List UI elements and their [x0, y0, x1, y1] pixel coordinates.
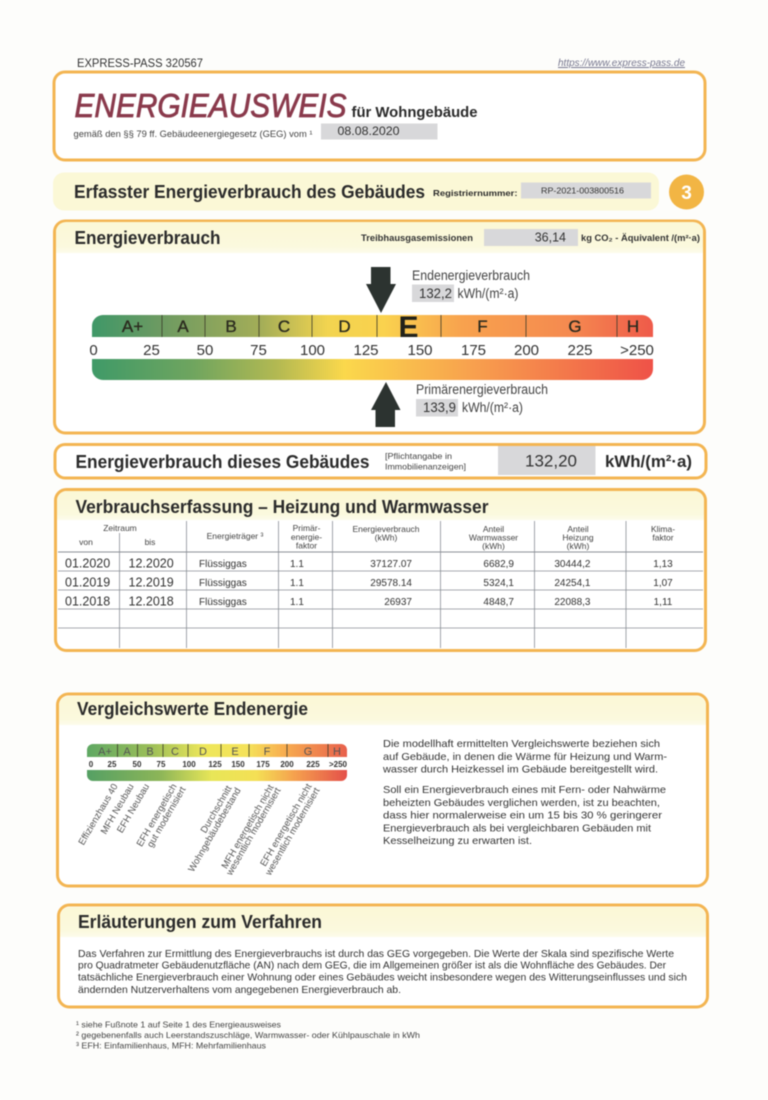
primary energy value: kWh/(m²·a) — [462, 400, 523, 415]
upper energy scale: H — [627, 317, 639, 336]
mini scale numbers: 125 — [208, 760, 222, 769]
table row 2020: 37127.07 — [370, 559, 412, 570]
mini scale numbers: 150 — [231, 760, 245, 769]
mini scale numbers: 100 — [182, 760, 196, 769]
heading: Energieverbrauch — [74, 228, 220, 248]
table row 2018: 1.1 — [290, 597, 304, 608]
explanatory text — [382, 738, 668, 847]
rotated building type labels: Wohngebäudebestand — [186, 786, 244, 874]
mini scale numbers: 0 — [89, 760, 94, 769]
section banner — [53, 172, 659, 210]
procedure text: tatsächliche Energieverbrauch einer Wohnung oder eines Gebäudes weicht insbesondere wegen des Witterungseinflusses und sich — [78, 972, 687, 984]
explanatory text: auf Gebäude, in denen die Wärme für Heizung und Warm- — [383, 751, 668, 763]
registration label: Registriernummer: — [433, 188, 518, 198]
table header: (kWh) — [567, 541, 589, 551]
upper energy scale: D — [338, 317, 351, 336]
note: [Pflichtangabe in — [385, 451, 452, 461]
explanatory text: Soll ein Energieverbrauch eines mit Fern- oder Nahwärme — [383, 784, 666, 796]
table header: Zeitraum — [103, 523, 137, 533]
mini scale numbers: 25 — [108, 760, 117, 769]
mini lower scale — [87, 770, 347, 781]
note line 2: Immobilienanzeigen] — [385, 462, 466, 472]
rotated building type labels: Effizienzhaus 40 — [77, 782, 121, 847]
scale numbers: 75 — [250, 342, 267, 359]
footnotes: ³ EFH: Einfamilienhaus, MFH: Mehrfamilienhaus — [76, 1040, 266, 1050]
table row 2019: 24254,1 — [554, 578, 591, 589]
primary energy value: 133,9 — [423, 400, 456, 415]
upper energy scale: G — [568, 317, 582, 336]
upper energy scale: B — [225, 317, 237, 336]
heading: Verbrauchserfassung – Heizung und Warmwasser — [76, 497, 488, 517]
emissions value — [484, 229, 578, 246]
registration number: RP-2021-003800516 — [541, 186, 624, 196]
scale numbers: 100 — [300, 342, 325, 359]
table row 2018: Flüssiggas — [199, 597, 247, 608]
table header: Anteil — [483, 524, 504, 534]
final energy value: kWh/(m²·a) — [458, 286, 518, 301]
mini upper scale: H — [333, 746, 341, 758]
table header: faktor — [652, 532, 674, 542]
heading: Erläuterungen zum Verfahren — [78, 912, 322, 932]
table row 2019: 1.1 — [290, 578, 304, 589]
mini upper scale: D — [199, 746, 207, 758]
table row 2019: 1,07 — [653, 578, 673, 589]
mini upper scale: A+ — [98, 746, 112, 758]
page number badge: 3 — [681, 183, 692, 204]
upper energy scale: C — [278, 317, 290, 336]
explanatory text: dass hier normalerweise ein um 15 bis 30 % geringerer — [383, 810, 663, 822]
scale numbers: 175 — [461, 342, 486, 359]
value — [498, 446, 596, 475]
primary energy value — [416, 399, 523, 416]
rotated building type labels: Durchschnitt — [199, 784, 235, 835]
rotated building type labels: gut modernisiert — [145, 785, 189, 849]
table row 2019: 29578.14 — [370, 578, 412, 589]
upper energy scale: F — [477, 317, 488, 336]
scale numbers — [89, 342, 654, 359]
mini upper scale: E — [231, 746, 239, 758]
table row 2019: 12.2019 — [128, 576, 174, 590]
explanatory text: Energieverbrauch als bei vergleichbaren Gebäuden mit — [383, 822, 651, 834]
arrow: final energy — [366, 267, 396, 313]
table header: Energieträger ³ — [207, 531, 264, 541]
mini upper scale: C — [171, 746, 179, 758]
explanatory text: Kesselheizung zu erwarten ist. — [383, 835, 532, 847]
table grid — [58, 521, 703, 648]
final energy value — [412, 284, 518, 302]
table row 2019: 5324,1 — [483, 578, 514, 589]
table row 2019 — [65, 576, 673, 590]
scale numbers: 200 — [514, 342, 539, 359]
rotated building type labels: EFH Neubau — [115, 782, 152, 835]
final energy label: Endenergieverbrauch — [412, 268, 530, 283]
scale numbers: 125 — [353, 342, 379, 359]
explanatory text: wasser durch Heizkessel im Gebäude bereitgestellt wird. — [382, 764, 658, 776]
procedure text: Das Verfahren zur Ermittlung des Energieverbrauchs ist durch das GEG vorgegeben. Die Werte der Skala sind spezifische Werte — [78, 948, 674, 960]
mini upper scale: A — [123, 746, 131, 758]
explanatory text: beheizten Gebäudes verglichen werden, ist zu beachten, — [383, 797, 660, 809]
table row 2020: 01.2020 — [65, 556, 110, 570]
table header: (kWh) — [482, 541, 505, 551]
rotated building type labels: wesentlich modernisiert — [224, 786, 284, 878]
heading: Vergleichswerte Endenergie — [77, 699, 308, 719]
table header: Primär- — [293, 523, 321, 533]
rotated building type labels: EFH energetisch — [135, 782, 180, 849]
footnotes: ² gegebenenfalls auch Leerstandszuschläge, Warmwasser- oder Kühlpauschale in kWh — [76, 1030, 420, 1040]
mini scale numbers: 175 — [256, 760, 270, 769]
mini upper scale: B — [146, 746, 154, 758]
table row 2019: 01.2019 — [65, 576, 110, 590]
table header: Heizung — [562, 532, 594, 542]
table row 2018 — [65, 594, 673, 608]
rotated building type labels: wesentlich modernisiert — [263, 786, 323, 878]
procedure text — [78, 948, 687, 996]
table header: von — [79, 537, 93, 547]
document id: EXPRESS-PASS 320567 — [77, 58, 203, 70]
scale numbers: 50 — [197, 342, 213, 359]
mini upper scale: F — [264, 746, 271, 758]
scale numbers: 0 — [89, 342, 98, 359]
scale numbers: >250 — [620, 342, 654, 359]
mini scale numbers: 200 — [280, 760, 294, 769]
mini scale numbers — [89, 760, 348, 769]
explanatory text: Die modellhaft ermittelten Vergleichswerte beziehen sich — [383, 738, 660, 750]
mini scale numbers: 75 — [157, 760, 166, 769]
panel: building consumption — [55, 444, 706, 478]
legal reference: gemäß den §§ 79 ff. Gebäudeenergiegesetz (GEG) vom ¹ — [74, 129, 313, 139]
page number badge — [669, 174, 704, 210]
table header: (kWh) — [375, 532, 397, 542]
table row 2020: Flüssiggas — [199, 559, 247, 570]
section heading: Erfasster Energieverbrauch des Gebäudes — [74, 182, 425, 202]
table row 2018: 26937 — [384, 597, 412, 608]
table row 2018: 22088,3 — [554, 597, 591, 608]
upper energy scale: A+ — [122, 317, 143, 336]
scale numbers: 225 — [567, 342, 593, 359]
table header: Klima- — [651, 524, 675, 534]
table row 2020 — [65, 556, 673, 570]
lower energy scale — [92, 359, 653, 380]
arrow: primary energy — [371, 382, 400, 427]
table header — [79, 523, 675, 551]
procedure text: pro Quadratmeter Gebäudenutzfläche (AN) nach dem GEG, die im Allgemeinen größer ist als die Wohnfläche des Gebäudes. Der — [78, 960, 666, 972]
table header: Energieverbrauch — [352, 524, 420, 534]
rotated building type labels: MFH energetisch nicht — [220, 783, 277, 871]
table header: energie- — [291, 532, 322, 542]
date field — [321, 124, 438, 140]
value: 132,20 — [525, 452, 577, 470]
procedure text: ändernden Nutzerverhaltens vom angegebenen Energieverbrauch ab. — [78, 984, 401, 996]
rotated building type labels — [77, 782, 323, 878]
footnotes: ¹ siehe Fußnote 1 auf Seite 1 des Energieausweises — [76, 1020, 281, 1030]
final energy value: 132,2 — [419, 286, 452, 301]
upper energy scale: A — [177, 317, 189, 336]
registration number — [521, 182, 651, 198]
panel: title — [54, 72, 705, 160]
table row 2018: 1,11 — [654, 597, 673, 608]
footnotes — [76, 1020, 420, 1050]
unit: kWh/(m²·a) — [605, 452, 692, 471]
panel: energy consumption — [54, 221, 704, 433]
table row 2020: 30444,2 — [554, 559, 591, 570]
heading: Energieverbrauch dieses Gebäudes — [76, 452, 370, 472]
table row 2018: 4848,7 — [483, 597, 514, 608]
scale numbers: 150 — [407, 342, 433, 359]
table row 2018: 01.2018 — [65, 594, 110, 608]
panel: consumption record table — [56, 490, 706, 650]
table header: bis — [145, 537, 155, 547]
title: ENERGIEAUSWEIS — [74, 88, 346, 125]
rotated building type labels: MFH Neubau — [99, 782, 137, 836]
upper energy scale — [92, 311, 653, 344]
mini scale numbers: >250 — [329, 760, 348, 769]
table row 2020: 1,13 — [653, 559, 673, 570]
table row 2018: 12.2018 — [128, 594, 174, 608]
emissions label: Treibhausgasemissionen — [361, 233, 473, 243]
mini scale numbers: 50 — [133, 760, 142, 769]
mini upper scale: G — [304, 746, 312, 758]
emissions unit: kg CO₂ - Äquivalent /(m²·a) — [581, 233, 700, 243]
website link: https://www.express-pass.de — [558, 58, 685, 69]
panel: comparison values — [58, 694, 708, 886]
emissions value: 36,14 — [535, 230, 566, 244]
table row 2020: 1.1 — [290, 559, 304, 570]
mini scale numbers: 225 — [306, 760, 320, 769]
upper energy scale: E — [398, 311, 419, 344]
rotated building type labels: EFH energetisch nicht — [258, 782, 315, 868]
panel: procedure explanation — [58, 905, 708, 1007]
table row 2020: 12.2020 — [128, 556, 174, 570]
scale numbers: 25 — [143, 342, 160, 359]
table header: faktor — [296, 540, 317, 550]
subtitle: für Wohngebäude — [352, 105, 478, 121]
table header: Anteil — [567, 524, 589, 534]
mini upper scale — [87, 744, 347, 758]
primary energy label: Primärenergieverbrauch — [416, 382, 548, 397]
date field: 08.08.2020 — [338, 124, 400, 138]
table row 2019: Flüssiggas — [199, 578, 247, 589]
table header: Warmwasser — [469, 532, 518, 542]
table row 2020: 6682,9 — [483, 559, 514, 570]
